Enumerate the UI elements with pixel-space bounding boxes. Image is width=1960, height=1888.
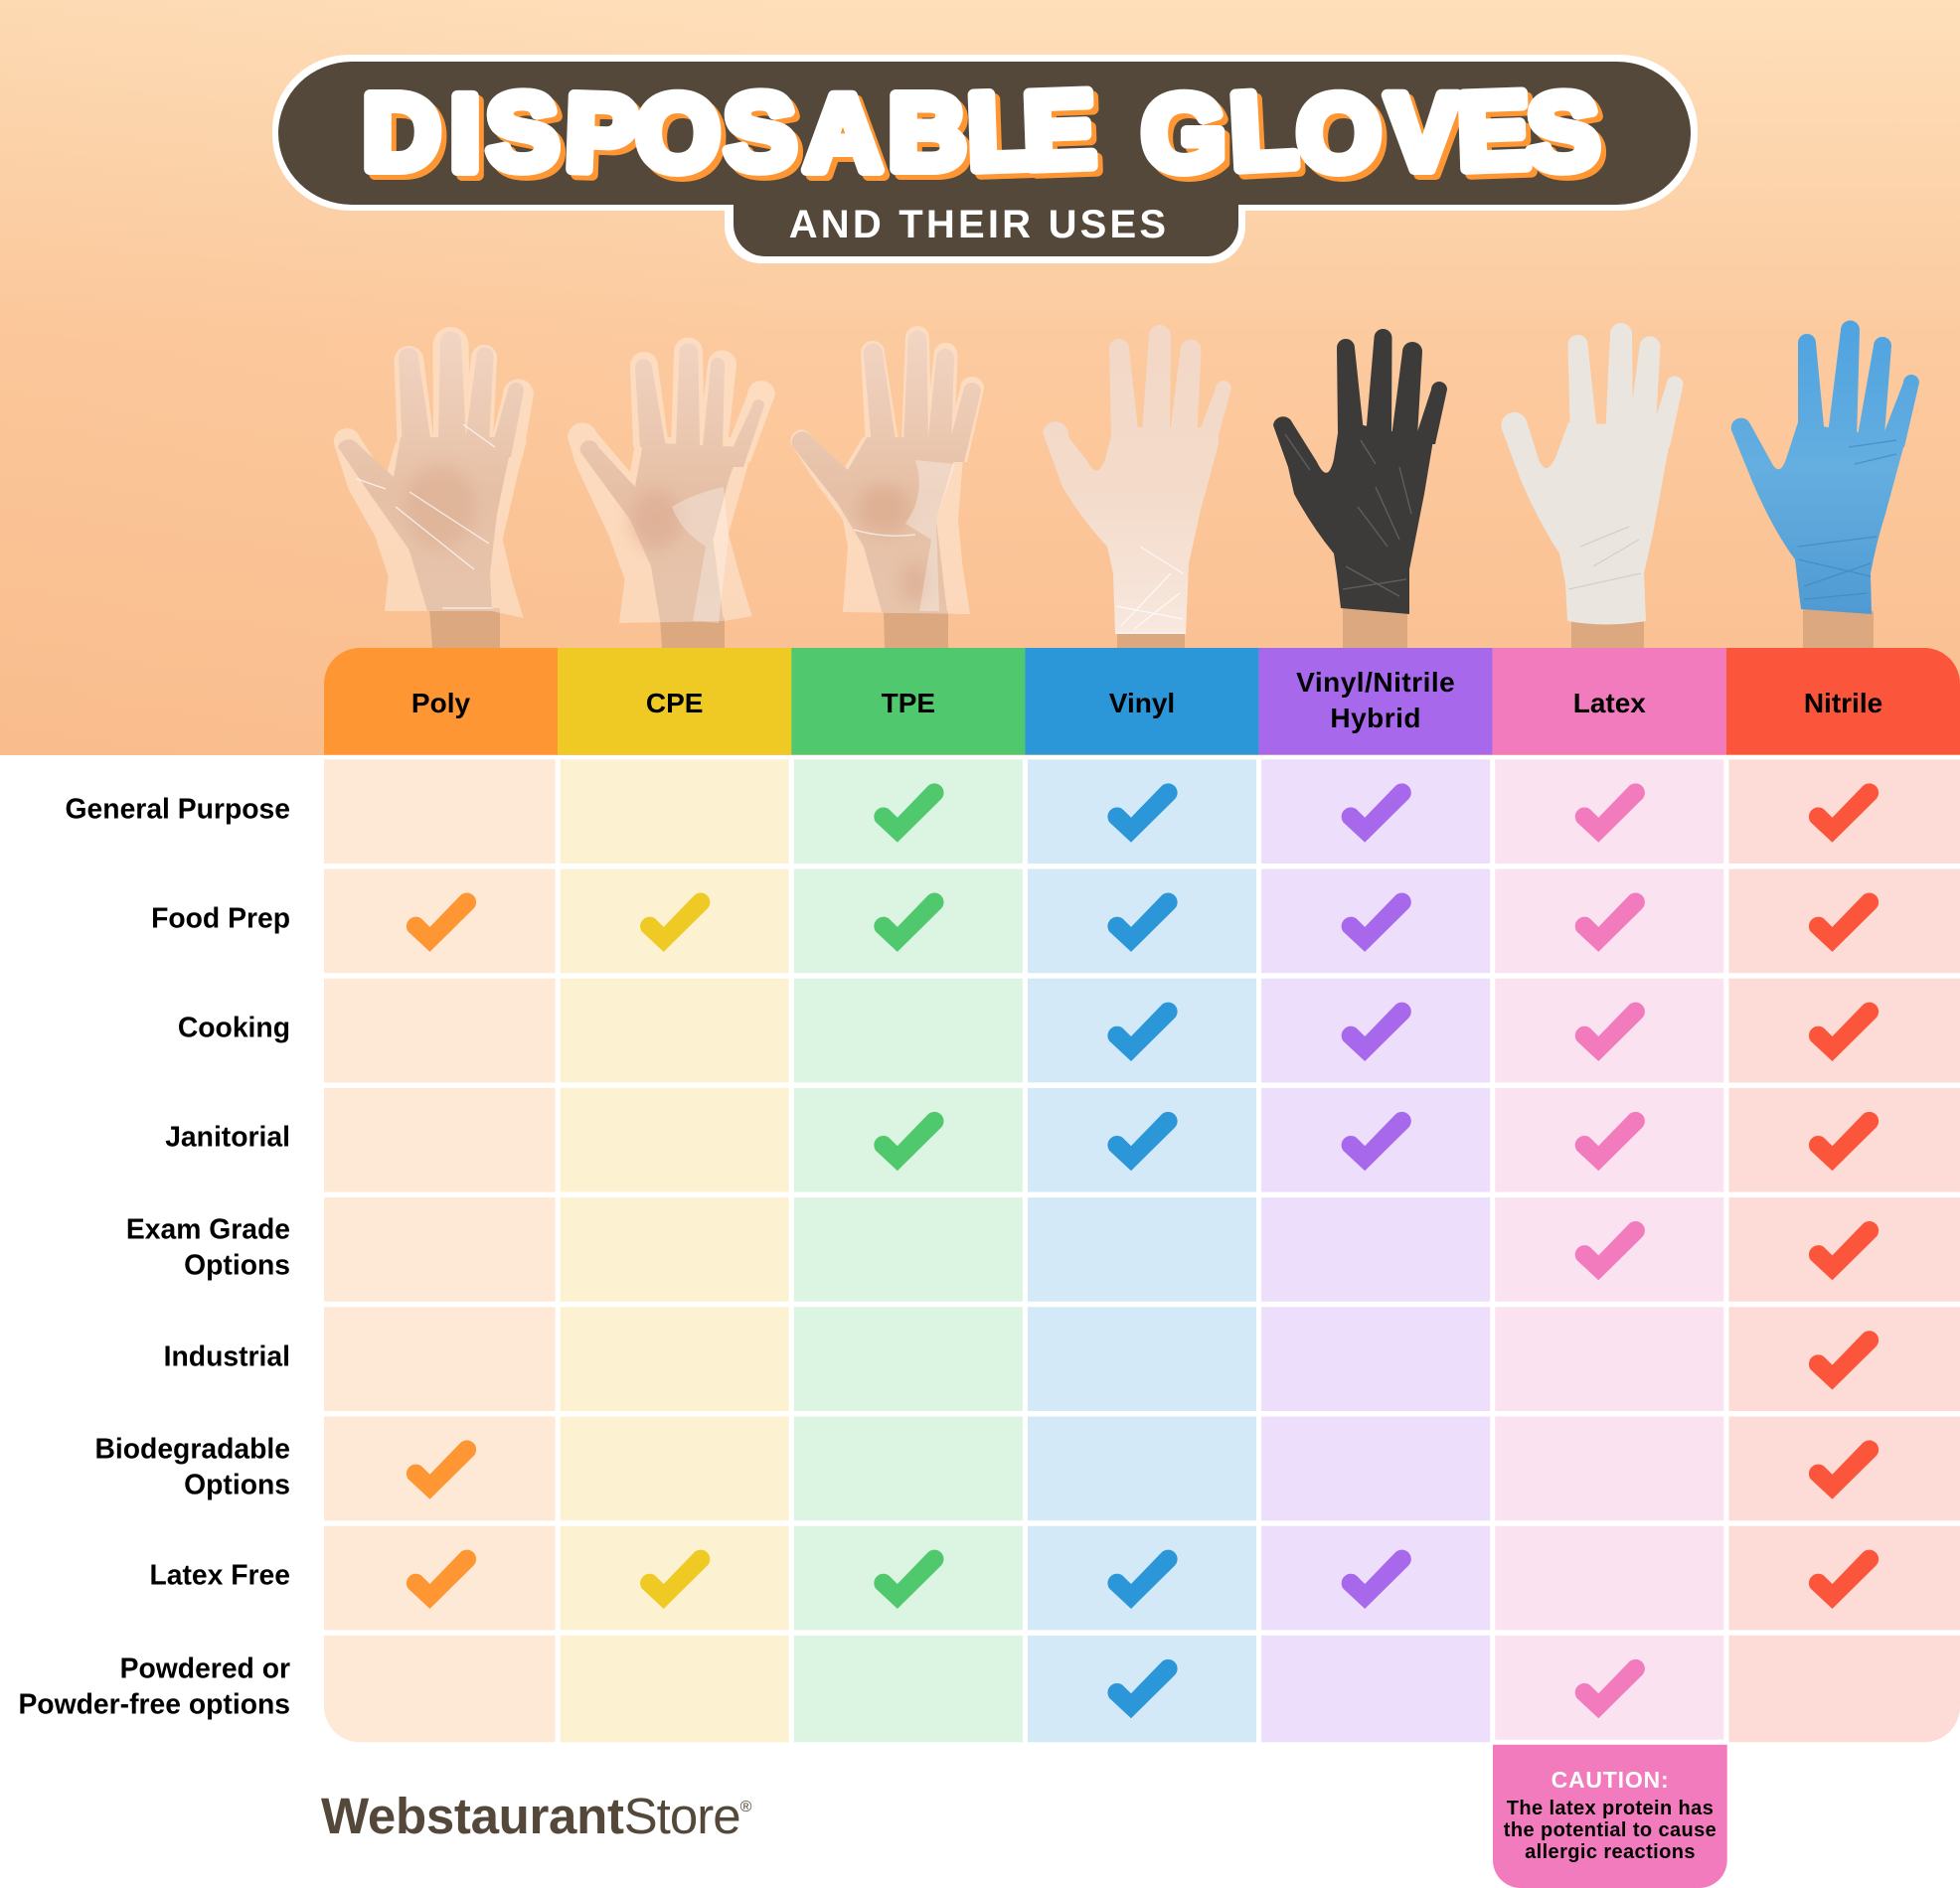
logo: WebstaurantStore: WebstaurantStore — [321, 1788, 740, 1844]
column: Vinyl/Nitrile Hybrid — [1259, 648, 1493, 1742]
check: Poly latex free — [407, 1550, 476, 1609]
check: CPE latex free — [640, 1550, 710, 1609]
check: Vinyl food prep — [1107, 893, 1178, 952]
cells: Poly — [324, 759, 556, 1742]
check: Hybrid food prep — [1342, 893, 1411, 952]
check: Vinyl general purpose — [1107, 783, 1178, 843]
check: TPE food prep — [874, 893, 944, 952]
header: CPE — [558, 648, 791, 755]
check: Nitrile industrial — [1809, 1331, 1878, 1390]
check: CPE food prep — [640, 893, 710, 952]
caution text: The latex protein has — [1507, 1798, 1714, 1819]
label: Industrial: Industrial — [164, 1339, 290, 1371]
check: Vinyl latex free — [1107, 1550, 1178, 1609]
header: CPE: CPE — [646, 688, 703, 718]
header: Vinyl — [1025, 648, 1259, 755]
column: Nitrile — [1726, 648, 1960, 1742]
header: TPE: TPE — [882, 688, 935, 718]
check: Hybrid janitorial — [1342, 1112, 1411, 1171]
cells: Nitrile — [1728, 759, 1960, 1742]
glove: vinyl hand — [1043, 325, 1231, 648]
check: Hybrid general purpose — [1342, 783, 1411, 843]
label: Latex Free: Latex Free — [149, 1558, 290, 1590]
check: Poly food prep — [407, 893, 476, 952]
column: Vinyl — [1025, 648, 1259, 1742]
label: Janitorial: Janitorial — [165, 1121, 290, 1153]
check: Hybrid cooking — [1342, 1003, 1411, 1061]
check: Latex powdered — [1575, 1659, 1645, 1718]
glove: nitrile hand — [1731, 320, 1919, 648]
glove: TPE hand — [790, 326, 984, 648]
caution text: allergic reactions — [1525, 1841, 1696, 1863]
label: Food Prep: Food Prep — [151, 902, 290, 934]
label: Biodegradable Options: Biodegradable — [94, 1433, 290, 1465]
cells: Vinyl/Nitrile Hybrid — [1261, 759, 1490, 1742]
logo: WebstaurantStore: ® — [740, 1799, 752, 1815]
check: Nitrile exam grade — [1809, 1221, 1878, 1280]
cells: CPE — [561, 759, 789, 1742]
check: Nitrile latex free — [1809, 1550, 1878, 1609]
check: TPE general purpose — [874, 783, 944, 843]
column: Poly — [324, 648, 558, 1742]
check: TPE janitorial — [874, 1112, 944, 1171]
caution heading: CAUTION: — [1552, 1767, 1669, 1793]
check: Latex general purpose — [1575, 783, 1645, 843]
cells: TPE — [794, 759, 1023, 1742]
callout: latex caution — [1493, 1745, 1727, 1888]
title banner — [272, 55, 1698, 263]
header: Vinyl/Nitrile Hybrid: Vinyl/Nitrile — [1296, 667, 1455, 698]
check: Latex exam grade — [1575, 1221, 1645, 1280]
row labels — [18, 793, 290, 1719]
header: Latex: Latex — [1573, 688, 1646, 718]
label: Powdered or Powder-free options: Powdered or — [120, 1652, 290, 1683]
header: Vinyl/Nitrile Hybrid: Hybrid — [1330, 703, 1421, 733]
header: TPE — [791, 648, 1025, 755]
column: Latex — [1493, 648, 1726, 1740]
header: Nitrile — [1726, 648, 1960, 755]
label: Cooking: Cooking — [178, 1012, 290, 1043]
check: TPE latex free — [874, 1550, 944, 1609]
title: DISPOSABLE GLOVES — [363, 69, 1601, 195]
glove: CPE hand — [568, 338, 775, 648]
label: General Purpose: General Purpose — [66, 793, 290, 825]
cells: Latex — [1495, 759, 1723, 1740]
check: Poly biodegradable — [407, 1440, 476, 1499]
check: Nitrile janitorial — [1809, 1112, 1878, 1171]
header: Nitrile: Nitrile — [1804, 688, 1882, 718]
check: Vinyl cooking — [1107, 1003, 1178, 1061]
label: Exam Grade Options: Options — [184, 1248, 290, 1280]
caution text: the potential to cause — [1504, 1819, 1716, 1841]
column: TPE — [791, 648, 1025, 1742]
glove: poly hand — [334, 327, 534, 648]
check: Nitrile food prep — [1809, 893, 1878, 952]
gloves row — [334, 320, 1919, 648]
label: Biodegradable Options: Options — [184, 1469, 290, 1500]
glove: latex hand — [1501, 323, 1684, 648]
label: Powdered or Powder-free options: Powder-free options — [18, 1687, 290, 1719]
header: Poly — [324, 648, 558, 755]
cells: Vinyl — [1028, 759, 1256, 1742]
subtitle: AND THEIR USES — [789, 203, 1169, 246]
check: Vinyl powdered — [1107, 1659, 1178, 1718]
label: Exam Grade Options: Exam Grade — [126, 1212, 290, 1244]
check: Latex food prep — [1575, 893, 1645, 952]
header: Vinyl: Vinyl — [1109, 688, 1175, 718]
check: Latex janitorial — [1575, 1112, 1645, 1171]
header: Vinyl/Nitrile Hybrid — [1259, 648, 1493, 755]
check: Vinyl janitorial — [1107, 1112, 1178, 1171]
background panel — [0, 0, 1960, 755]
glove: vinyl/nitrile hybrid hand — [1273, 329, 1447, 648]
check: Nitrile general purpose — [1809, 783, 1878, 843]
check: Nitrile biodegradable — [1809, 1440, 1878, 1499]
check: Hybrid latex free — [1342, 1550, 1411, 1609]
column: CPE — [558, 648, 791, 1742]
check: Latex cooking — [1575, 1003, 1645, 1061]
header: Latex — [1493, 648, 1726, 755]
check: Nitrile cooking — [1809, 1003, 1878, 1061]
header: Poly: Poly — [411, 688, 470, 718]
